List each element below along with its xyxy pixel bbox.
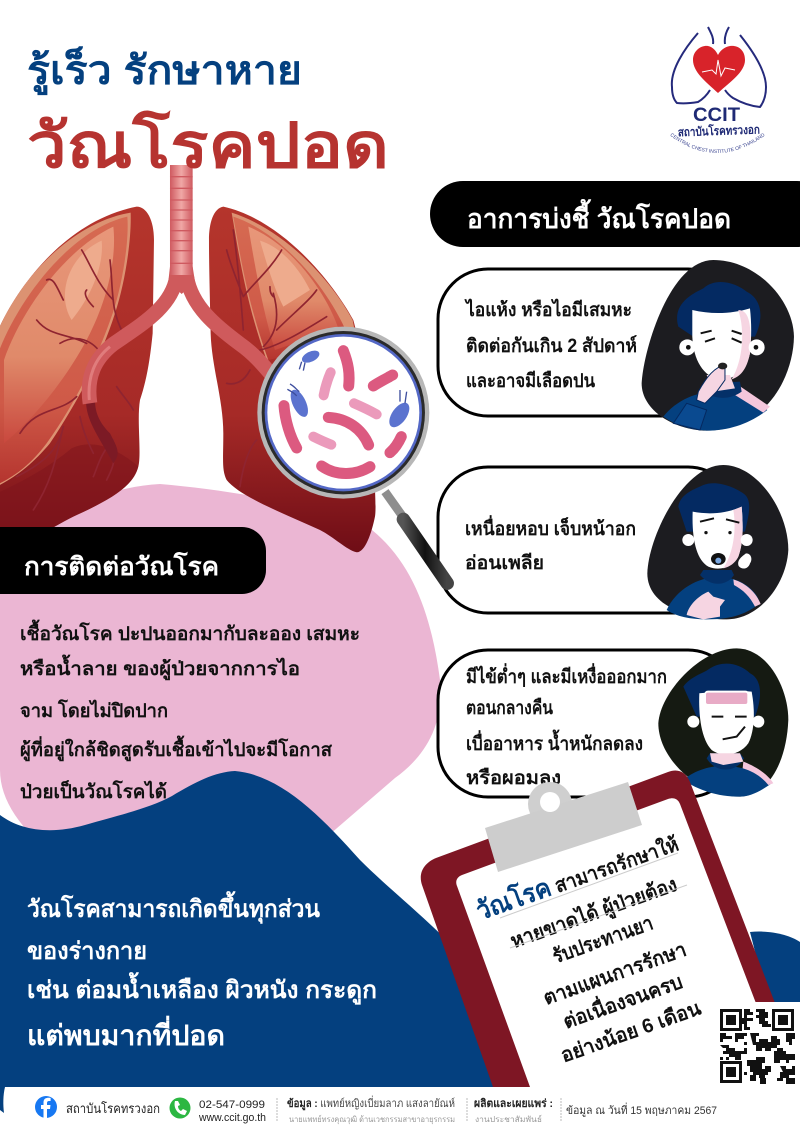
symptom text 2: อ่อนเพลีย — [465, 552, 544, 574]
right lung — [209, 207, 376, 552]
clipboard — [421, 770, 800, 1087]
clipboard text: ต่อเนื่องจนครบ — [559, 966, 686, 1034]
icon: coughing person — [642, 260, 794, 431]
symptom text 1: ติดต่อกันเกิน 2 สัปดาห์ — [466, 335, 637, 357]
logo acronym: CCIT — [693, 105, 740, 126]
logo heart — [693, 46, 745, 93]
icon: feverish person — [658, 648, 788, 797]
facebook name: สถาบันโรคทรวงอก — [66, 1101, 160, 1116]
blue background blob — [0, 771, 530, 1087]
text block: body sites: เช่น ต่อมน้ำเหลือง ผิวหนัง กระดูก — [27, 971, 377, 1005]
heading pill: symptoms — [430, 181, 800, 247]
symptoms heading: อาการบ่งชี้ วัณโรคปอด — [467, 198, 731, 234]
icon: phone — [170, 1098, 190, 1118]
title line 1: รู้เร็ว รักษาหาย — [27, 45, 302, 95]
icon: facebook — [35, 1096, 57, 1118]
magnifying glass — [257, 327, 447, 583]
footer — [35, 1095, 717, 1124]
symptom text 3: หรือผอมลง — [466, 767, 561, 789]
producer credit: งานประชาสัมพันธ์ — [475, 1114, 542, 1124]
text block: body sites: แต่พบมากที่ปอด — [27, 1015, 225, 1051]
producer credit: ผลิตและเผยแพร่ : — [474, 1097, 553, 1110]
footer left blue sliver — [0, 1087, 5, 1113]
symptom text 3: ตอนกลางคืน — [466, 697, 553, 719]
panel: symptom card 2 — [438, 465, 788, 619]
lungs illustration — [0, 165, 376, 552]
clipboard clip — [485, 782, 642, 872]
contact phone and web: 02-547-0999 — [199, 1099, 265, 1111]
QR code — [711, 1002, 800, 1088]
trachea and bronchi — [86, 165, 272, 463]
contact phone and web — [198, 1099, 266, 1124]
symptom text 2 — [465, 515, 636, 574]
logo thai name: สถาบันโรคทรวงอก — [678, 122, 760, 139]
data source credit: นายแพทย์ทรงคุณวุฒิ ด้านเวชกรรมสาขาอายุรกรรม — [289, 1114, 455, 1124]
logo english name: CENTRAL CHEST INSTITUTE OF THAILAND — [670, 133, 764, 153]
lens with bacteria — [257, 327, 429, 499]
logo: CCIT — [670, 26, 767, 153]
title — [27, 45, 389, 181]
text block: transmission: ป่วยเป็นวัณโรคได้ — [20, 779, 167, 803]
symptom text 3 — [466, 663, 667, 789]
clipboard text: วัณโรค สามารถรักษาให้ — [472, 826, 682, 926]
publication date: ข้อมูล ณ วันที่ 15 พฤษภาคม 2567 — [566, 1102, 717, 1117]
symptom text 3: เบื่ออาหาร น้ำหนักลดลง — [466, 729, 643, 755]
logo lungs outline — [672, 27, 766, 107]
left lung — [0, 207, 154, 552]
text block: transmission: เชื้อวัณโรค ปะปนออกมากับละออง เสมหะ — [20, 619, 360, 645]
symptom text 1: ไอแห้ง หรือไอมีเสมหะ — [464, 298, 632, 321]
producer credit — [474, 1097, 553, 1124]
transmission heading: การติดต่อวัณโรค — [24, 551, 219, 581]
text block: transmission — [20, 619, 360, 803]
symptom text 2: เหนื่อยหอบ เจ็บหน้าอก — [465, 515, 636, 540]
heading pill: transmission — [0, 527, 266, 594]
pink background blob — [0, 484, 441, 860]
clipboard board — [421, 770, 800, 1087]
clipboard text: ตามแผนการรักษา — [541, 939, 689, 1010]
icon: breathless person — [647, 465, 788, 619]
clipboard text: อย่างน้อย 6 เดือน — [558, 996, 704, 1067]
text block: transmission: หรือน้ำลาย ของผู้ป่วยจากการไอ — [20, 654, 300, 681]
panel: symptom card 1 — [438, 260, 794, 431]
blue corner right — [750, 932, 800, 1010]
title line 2: วัณโรคปอด — [27, 109, 389, 181]
clipboard text: หายขาดได้ ผู้ป่วยต้อง — [507, 872, 681, 955]
text block: body sites — [27, 890, 377, 1051]
text block: body sites: วัณโรคสามารถเกิดขึ้นทุกส่วน — [27, 890, 321, 925]
symptom text 1 — [464, 298, 637, 392]
contact phone and web: www.ccit.go.th — [198, 1112, 266, 1124]
clipboard text: รับประทานยา — [550, 912, 656, 968]
symptom text 3: มีไข้ต่ำๆ และมีเหงื่อออกมาก — [466, 663, 667, 688]
symptom text 1: และอาจมีเลือดปน — [466, 370, 595, 392]
text block: transmission: จาม โดยไม่ปิดปาก — [20, 699, 168, 722]
data source credit — [287, 1095, 455, 1124]
panel: symptom card 3 — [438, 648, 788, 797]
data source credit: ข้อมูล : แพทย์หญิงเบี่ยมลาภ แสงลายัณห์ — [287, 1095, 455, 1111]
text block: body sites: ของร่างกาย — [27, 938, 147, 965]
clipboard paper — [456, 798, 770, 1087]
magnifier handle — [385, 492, 447, 583]
clipboard text — [472, 826, 704, 1067]
text block: transmission: ผู้ที่อยู่ใกล้ชิดสูดรับเชื้อเข้าไปจะมีโอกาส — [20, 735, 332, 762]
